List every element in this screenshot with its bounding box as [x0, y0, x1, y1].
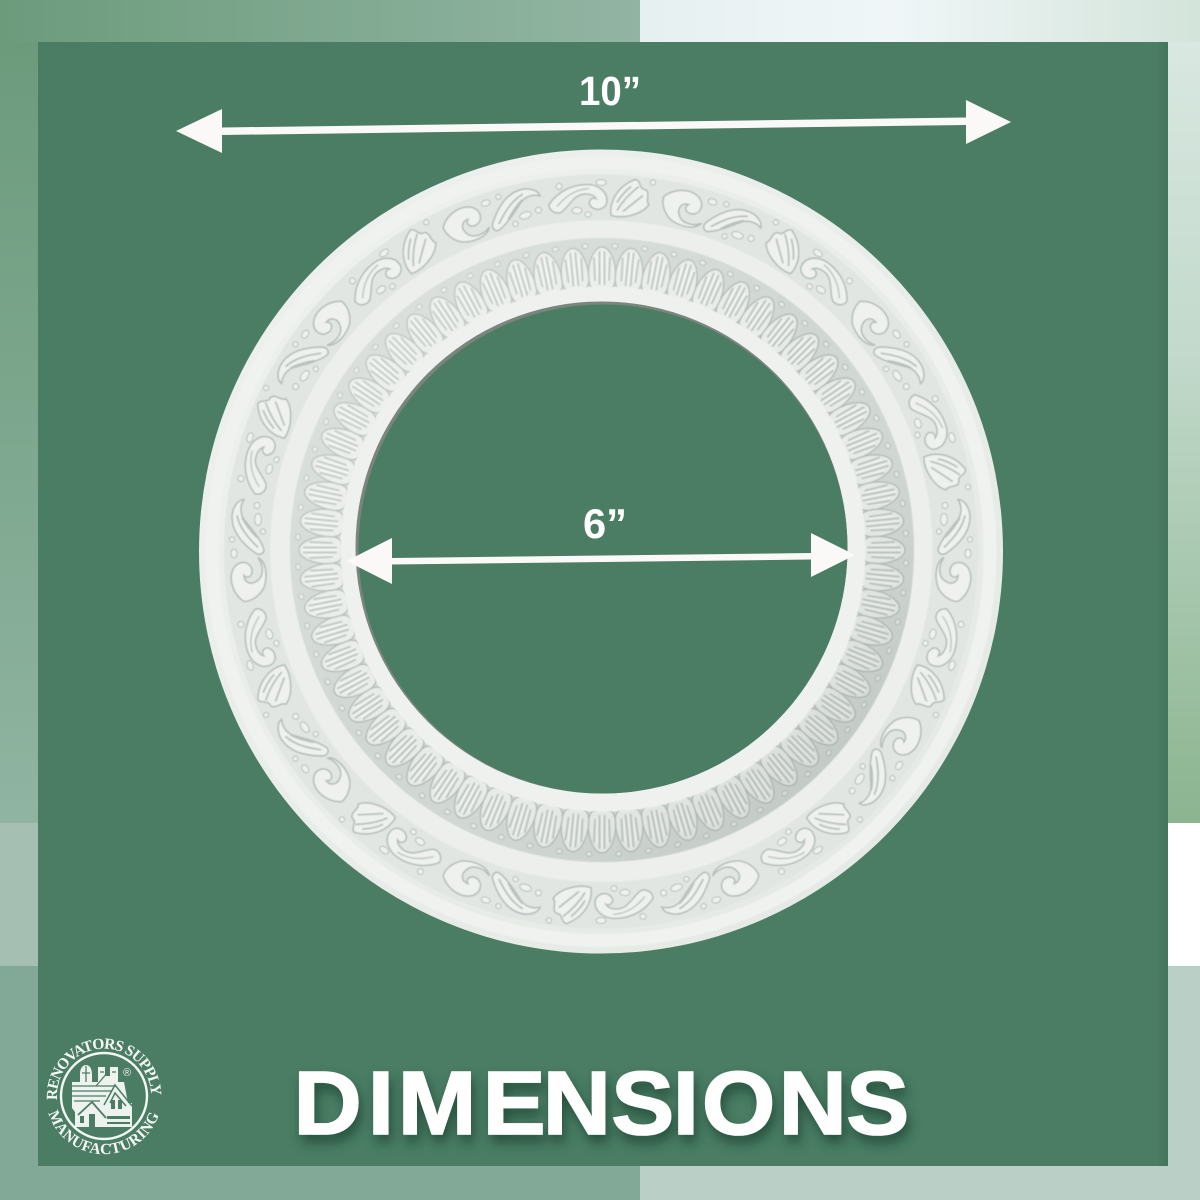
front gable	[104, 1085, 132, 1106]
registered mark: ®	[123, 1067, 131, 1079]
inner edge shadow	[356, 302, 848, 794]
ornamental band	[229, 180, 973, 924]
arrow: inner diameter	[346, 533, 855, 584]
scroll and leaf motifs	[229, 180, 973, 924]
arrow: outer diameter	[176, 100, 1011, 153]
6 inch measurement	[346, 500, 855, 584]
centre opening	[358, 304, 848, 794]
house silhouette	[72, 1065, 132, 1127]
logo circle	[61, 1053, 147, 1139]
egg band shading	[315, 263, 889, 837]
inner lip	[350, 296, 856, 802]
outer rim	[199, 150, 1003, 954]
logo text: top arc: RENOVATORS SUPPLY	[46, 1038, 162, 1100]
label: 6 inches: 6”	[583, 500, 627, 547]
label: 10 inches: 10”	[579, 68, 641, 114]
egg mouldings	[296, 244, 908, 856]
egg band	[296, 244, 908, 856]
house line work	[72, 1066, 116, 1101]
icon: house	[72, 1065, 132, 1127]
windows and door	[80, 1100, 130, 1127]
logo: Renovators Supply Manufacturing	[46, 1038, 162, 1154]
10 inch measurement	[176, 68, 1011, 153]
rim highlight	[212, 162, 990, 940]
title: DIMENSIONS	[293, 1052, 909, 1154]
logo text: bottom arc: MANUFACTURING	[48, 1109, 158, 1154]
middle ridge	[281, 230, 923, 872]
small gable	[78, 1102, 106, 1118]
ceiling medallion ring	[199, 150, 1003, 954]
